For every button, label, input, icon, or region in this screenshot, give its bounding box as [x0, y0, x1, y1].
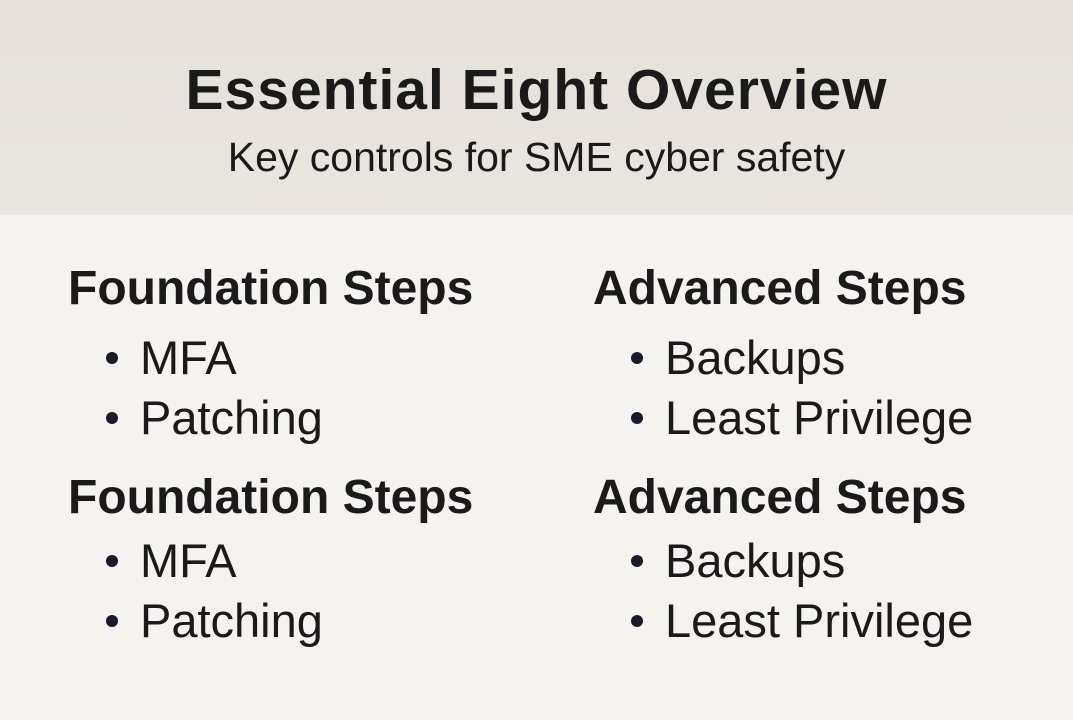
list: foundation 2: MFA: [140, 534, 237, 587]
heading: foundation steps 2: Foundation Steps: [68, 471, 473, 524]
title: Essential Eight Overview: [186, 58, 887, 122]
list: foundation 1: MFA: [140, 331, 237, 384]
list: foundation 2: Patching: [140, 594, 323, 647]
list: advanced 1: [631, 331, 973, 444]
list: advanced 2: Backups: [665, 534, 845, 587]
list: advanced 2: [631, 534, 973, 647]
list: foundation 1: [106, 331, 323, 444]
heading: advanced steps 1: Advanced Steps: [593, 262, 966, 315]
list: advanced 1: Least Privilege: [665, 391, 973, 444]
list: foundation 1: Patching: [140, 391, 323, 444]
heading: advanced steps 2: Advanced Steps: [593, 471, 966, 524]
subtitle: Key controls for SME cyber safety: [228, 134, 845, 180]
list: foundation 2: [106, 534, 323, 647]
heading: foundation steps 1: Foundation Steps: [68, 262, 473, 315]
list: advanced 1: Backups: [665, 331, 845, 384]
list: advanced 2: Least Privilege: [665, 594, 973, 647]
header band: [0, 0, 1073, 215]
